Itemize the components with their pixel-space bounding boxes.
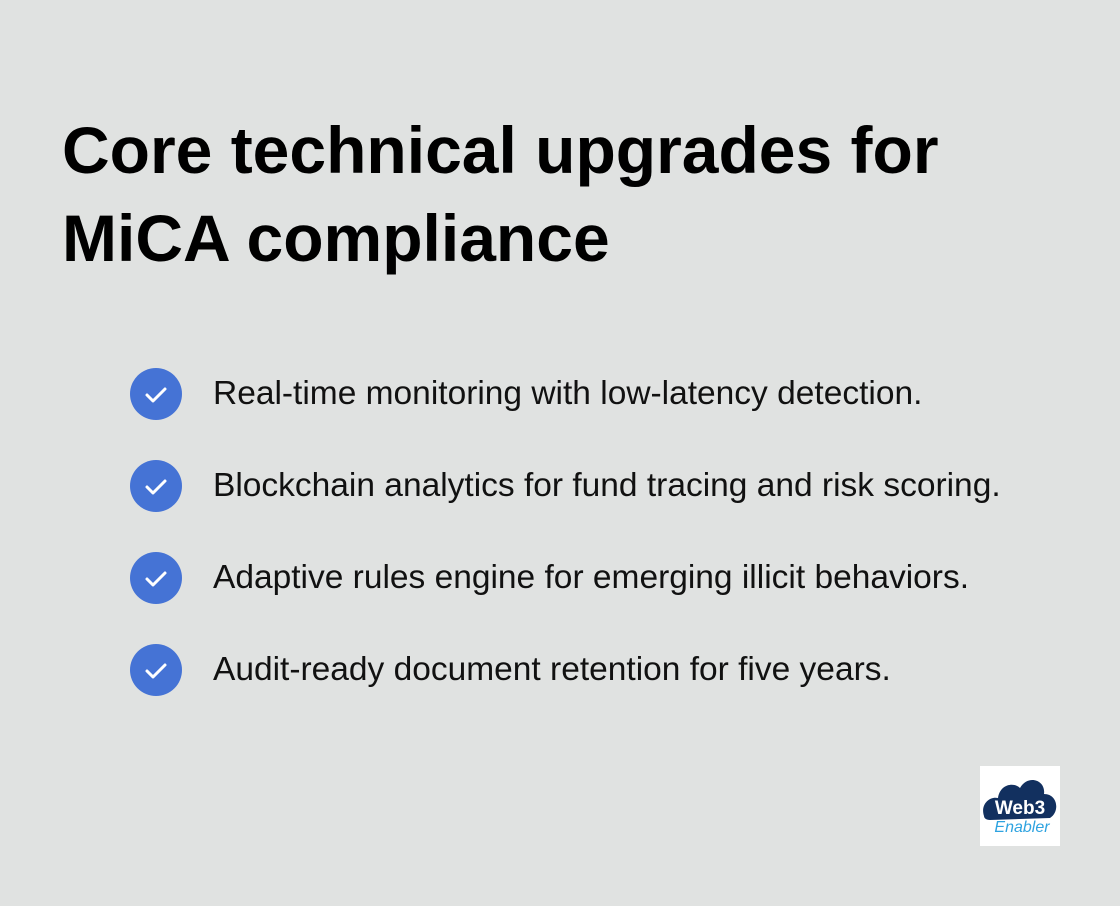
title — [62, 113, 939, 275]
list item 4: Audit-ready document retention for five years. — [213, 651, 891, 688]
list item 2: Blockchain analytics for fund tracing and risk scoring. — [213, 467, 1001, 504]
icon: check — [130, 644, 182, 696]
icon: check — [130, 368, 182, 420]
logo: Web3 — [995, 798, 1045, 819]
list item 1 — [130, 368, 922, 420]
logo — [980, 766, 1060, 846]
title: MiCA compliance — [62, 201, 610, 275]
title: Core technical upgrades for — [62, 113, 939, 187]
list item 4 — [130, 644, 891, 696]
list item 1: Real-time monitoring with low-latency detection. — [213, 375, 922, 412]
logo: Enabler — [994, 819, 1050, 836]
list item 3 — [130, 552, 969, 604]
icon: check — [130, 552, 182, 604]
icon: check — [130, 460, 182, 512]
list item 3: Adaptive rules engine for emerging illicit behaviors. — [213, 559, 969, 596]
list item 2 — [130, 460, 1001, 512]
